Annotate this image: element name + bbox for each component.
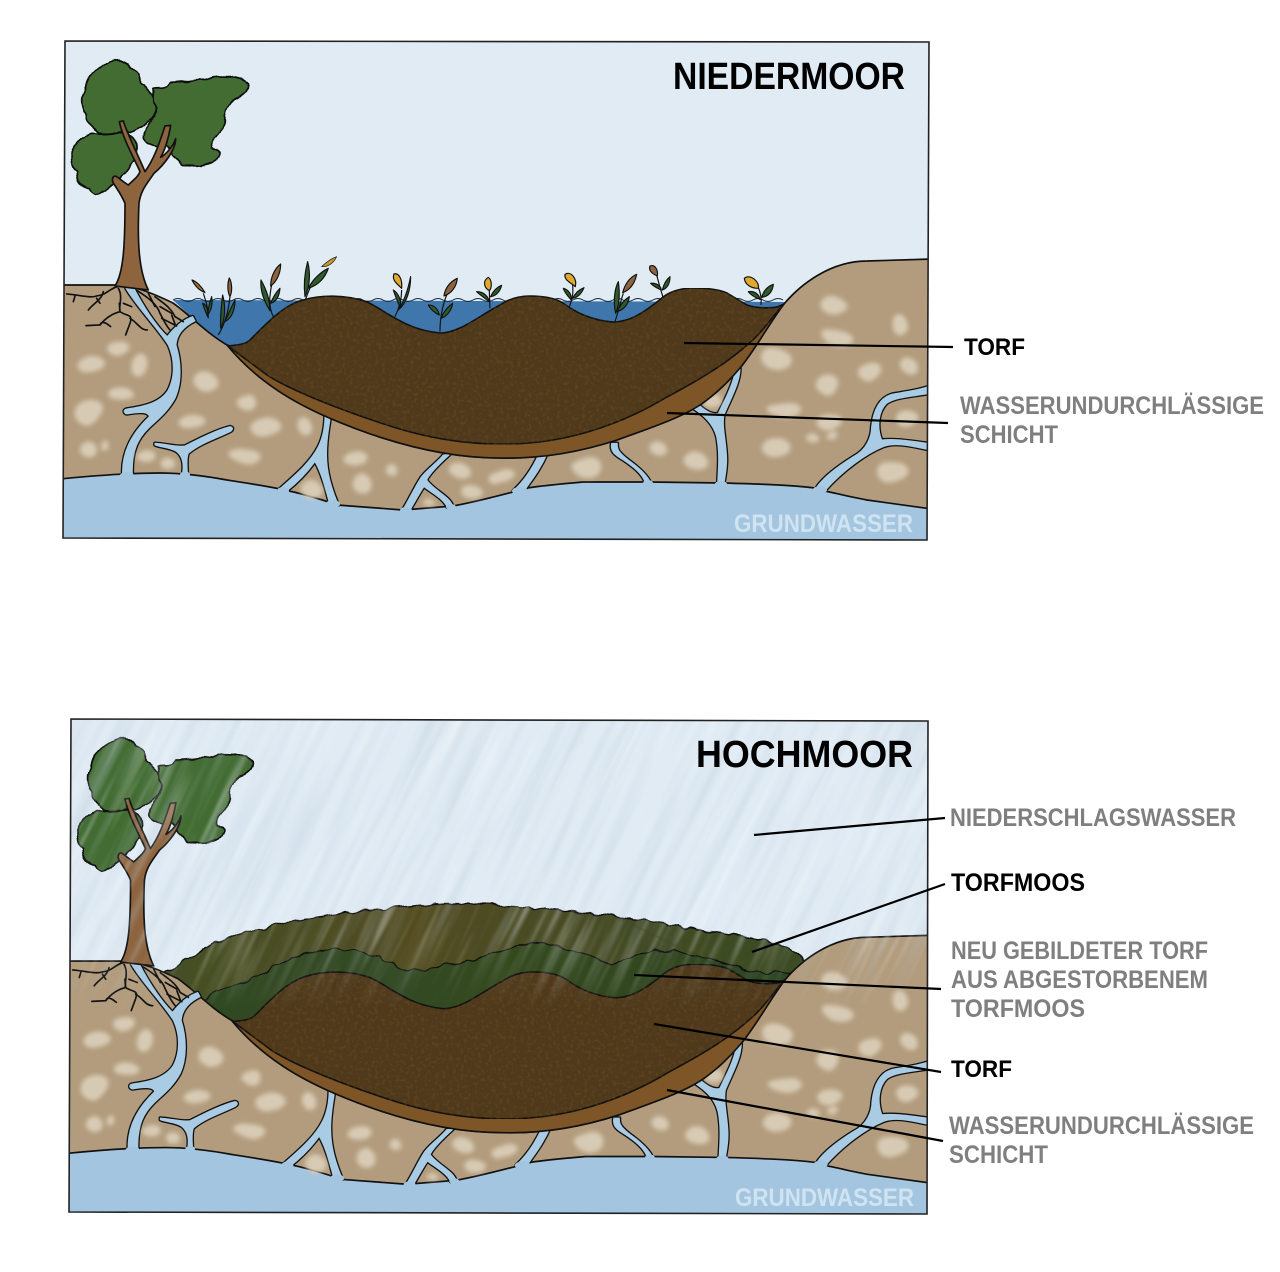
- callout: Torf (Niedermoor): [684, 334, 1025, 361]
- label: Grundwasser: GRUNDWASSER: [735, 1184, 914, 1212]
- tree roots: [73, 963, 188, 1011]
- tree roots: [67, 287, 183, 335]
- title: Hochmoor: HOCHMOOR: [696, 734, 913, 776]
- title: Niedermoor: NIEDERMOOR: [673, 56, 905, 98]
- callout: neu gebildeter Torf: AUS ABGESTORBENEM: [951, 966, 1208, 994]
- callout: Torf (Hochmoor): TORF: [951, 1056, 1012, 1083]
- pond water: [172, 298, 784, 345]
- water veins: [126, 964, 933, 1188]
- sky: [64, 42, 928, 312]
- groundwater: [64, 474, 926, 540]
- frame: [69, 719, 928, 1214]
- panel: Niedermoor: [60, 38, 933, 544]
- label: Grundwasser: GRUNDWASSER: [734, 510, 913, 538]
- callout: Torfmoos: TORFMOOS: [951, 869, 1085, 897]
- frame: [63, 41, 929, 540]
- soil scene: [66, 738, 933, 1188]
- peat: [228, 288, 782, 444]
- ground: [60, 259, 932, 510]
- callout: wasserundurchlässige Schicht (Hochmoor): [667, 1090, 1254, 1169]
- callout: Torf (Niedermoor): TORF: [964, 334, 1025, 361]
- stones: [76, 297, 918, 506]
- sky: [70, 720, 928, 972]
- callout: neu gebildeter Torf: TORFMOOS: [951, 995, 1085, 1023]
- new peat from dead moss: [205, 942, 791, 1020]
- callout: Torfmoos: [752, 869, 1085, 952]
- tree: [77, 738, 253, 966]
- impermeable layer: [227, 304, 784, 458]
- peat: [233, 964, 783, 1119]
- groundwater: [70, 1148, 926, 1214]
- callout: wasserundurchlässige Schicht (Hochmoor): SCHICHT: [949, 1141, 1048, 1169]
- callout: Torf (Hochmoor): [654, 1024, 1012, 1083]
- reed plants: [192, 257, 773, 335]
- moss layers: [160, 903, 806, 1030]
- callout: neu gebildeter Torf: [634, 937, 1208, 1023]
- impermeable layer: [232, 980, 785, 1133]
- tree: [71, 60, 249, 290]
- panel: Hochmoor: [60, 710, 940, 1217]
- peat moss, living layer: [164, 902, 804, 1000]
- rain streaks: [60, 710, 940, 1010]
- ground: [66, 935, 932, 1184]
- callout: Niederschlagswasser: [754, 804, 1236, 835]
- water veins: [120, 288, 933, 514]
- stones: [82, 973, 918, 1180]
- callout: wasserundurchlässige Schicht (Niedermoor): SCHICHT: [960, 421, 1058, 449]
- callout: Niederschlagswasser: NIEDERSCHLAGSWASSER: [950, 804, 1236, 832]
- callout: wasserundurchlässige Schicht (Niedermoor): [667, 392, 1264, 449]
- callout: neu gebildeter Torf: NEU GEBILDETER TORF: [951, 937, 1208, 965]
